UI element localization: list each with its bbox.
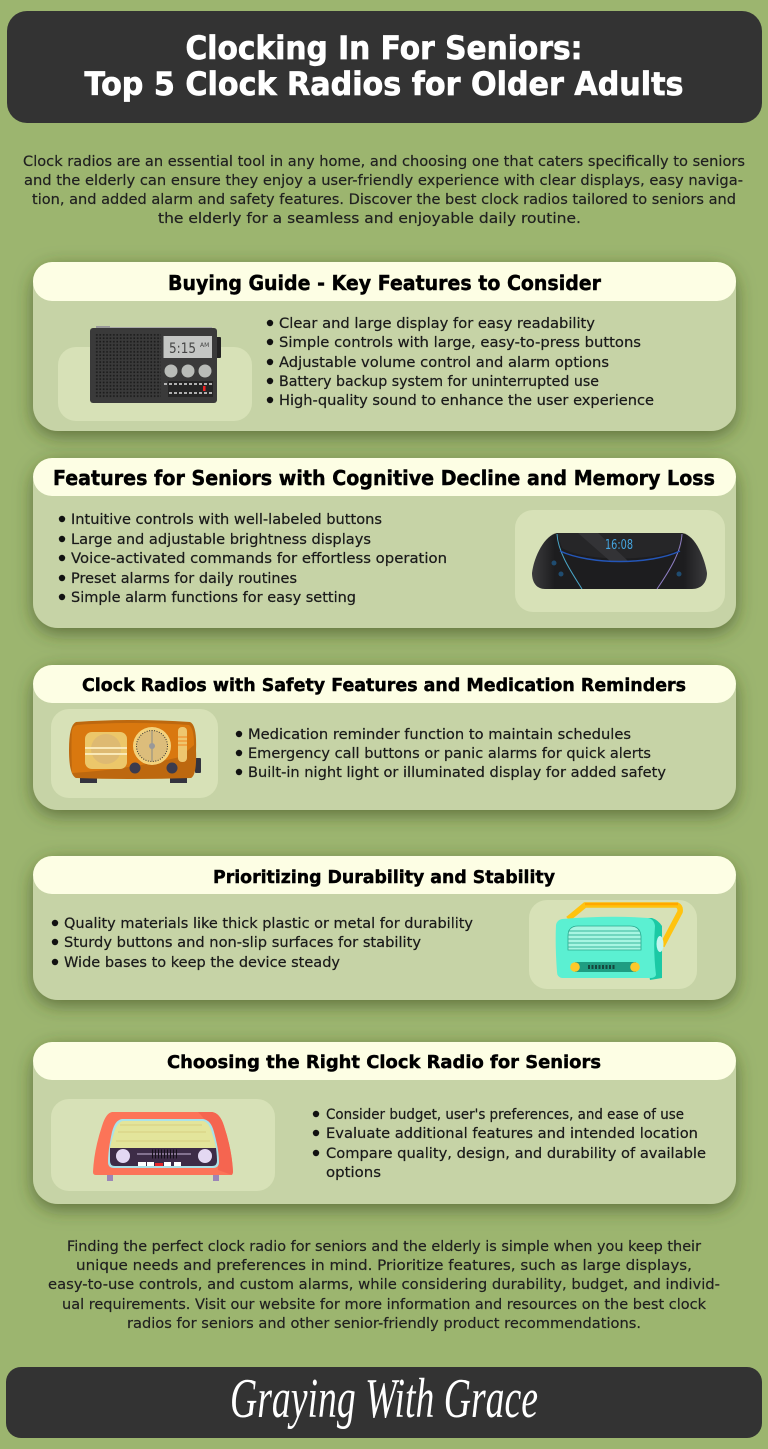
bullet list: choosing: Compare quality, design, and durability of available xyxy=(326,1146,706,1162)
heading: durability: Prioritizing Durability and Stability xyxy=(213,867,555,888)
bullet list: safety features: Built-in night light or illuminated display for added safety xyxy=(248,765,666,781)
image tile: digital radio xyxy=(58,326,252,421)
heading: safety features xyxy=(33,665,736,703)
closing paragraph: radios for seniors and other senior-friendly product recommendations. xyxy=(127,1316,641,1332)
bullet list: buying guide: Adjustable volume control and alarm options xyxy=(279,355,609,371)
closing paragraph: ual requirements. Visit our website for more information and resources on the best clock xyxy=(62,1297,707,1313)
closing paragraph: Finding the perfect clock radio for seniors and the elderly is simple when you keep their xyxy=(67,1239,701,1255)
image tile: digital radio: 5:15 xyxy=(169,341,196,357)
bullet list: cognitive decline: Large and adjustable brightness displays xyxy=(71,532,371,548)
bullet list: choosing: options xyxy=(326,1165,381,1181)
panel: safety features xyxy=(33,665,736,810)
image tile: digital radio: AM xyxy=(200,342,209,349)
footer banner xyxy=(6,1367,762,1438)
heading: buying guide: Buying Guide - Key Features to Consider xyxy=(168,271,601,295)
bullet list: safety features: Emergency call buttons or panic alarms for quick alerts xyxy=(248,746,651,762)
bullet list: durability: Wide bases to keep the device steady xyxy=(64,955,340,971)
bullet list: cognitive decline: Preset alarms for daily routines xyxy=(71,571,297,587)
bullet list: cognitive decline: Voice-activated commands for effortless operation xyxy=(71,551,447,567)
intro paragraph xyxy=(23,154,745,227)
image tile: teal retro radio xyxy=(529,900,697,989)
closing paragraph: unique needs and preferences in mind. Prioritize features, such as large displays, xyxy=(76,1258,692,1274)
bullet list: durability: Quality materials like thick plastic or metal for durability xyxy=(64,916,473,932)
image tile: black alarm clock: 16:08 xyxy=(605,538,633,553)
title banner: Clocking In For Seniors: xyxy=(186,29,582,67)
heading: choosing xyxy=(33,1042,736,1080)
heading: buying guide xyxy=(33,262,736,301)
bullet list: cognitive decline: Simple alarm functions for easy setting xyxy=(71,590,356,606)
heading: cognitive decline xyxy=(33,458,736,496)
image tile: red retro radio xyxy=(51,1099,275,1191)
bullet list: buying guide: High-quality sound to enhance the user experience xyxy=(279,393,654,409)
bullet list: buying guide xyxy=(267,316,654,409)
bullet list: safety features xyxy=(236,727,666,781)
image tile: orange retro radio xyxy=(51,709,218,798)
bullet list: choosing: Consider budget, user's preferences, and ease of use xyxy=(326,1107,684,1123)
title banner xyxy=(7,11,762,123)
bullet list: choosing: Evaluate additional features and intended location xyxy=(326,1126,698,1142)
heading: choosing: Choosing the Right Clock Radio for Seniors xyxy=(167,1052,601,1073)
intro paragraph: and the elderly can ensure they enjoy a user-friendly experience with clear displays, easy naviga- xyxy=(24,173,743,189)
bullet list: cognitive decline xyxy=(59,512,447,606)
heading: cognitive decline: Features for Seniors with Cognitive Decline and Memory Loss xyxy=(53,466,715,490)
closing paragraph: easy-to-use controls, and custom alarms, while considering durability, budget, and individ- xyxy=(48,1277,720,1293)
bullet list: cognitive decline: Intuitive controls with well-labeled buttons xyxy=(71,512,382,528)
bullet list: buying guide: Simple controls with large, easy-to-press buttons xyxy=(279,335,641,351)
title banner: Top 5 Clock Radios for Older Adults xyxy=(84,65,684,103)
bullet list: choosing xyxy=(313,1107,706,1181)
panel: durability xyxy=(33,856,736,1000)
panel: buying guide xyxy=(33,262,736,431)
intro paragraph: tion, and added alarm and safety features. Discover the best clock radios tailored to seniors and xyxy=(32,192,736,208)
bullet list: buying guide: Battery backup system for uninterrupted use xyxy=(279,374,599,390)
closing paragraph xyxy=(48,1239,720,1332)
panel: cognitive decline xyxy=(33,458,736,628)
bullet list: durability xyxy=(52,916,473,971)
intro paragraph: Clock radios are an essential tool in any home, and choosing one that caters specifically to seniors xyxy=(23,154,745,170)
intro paragraph: the elderly for a seamless and enjoyable daily routine. xyxy=(158,211,581,227)
panel: choosing xyxy=(33,1042,736,1204)
footer banner: Graying With Grace xyxy=(230,1368,538,1430)
heading: durability xyxy=(33,856,736,894)
bullet list: durability: Sturdy buttons and non-slip surfaces for stability xyxy=(64,935,421,951)
image tile: black alarm clock xyxy=(515,510,725,612)
heading: safety features: Clock Radios with Safety Features and Medication Reminders xyxy=(82,675,686,696)
bullet list: safety features: Medication reminder function to maintain schedules xyxy=(248,727,631,743)
bullet list: buying guide: Clear and large display for easy readability xyxy=(279,316,595,332)
